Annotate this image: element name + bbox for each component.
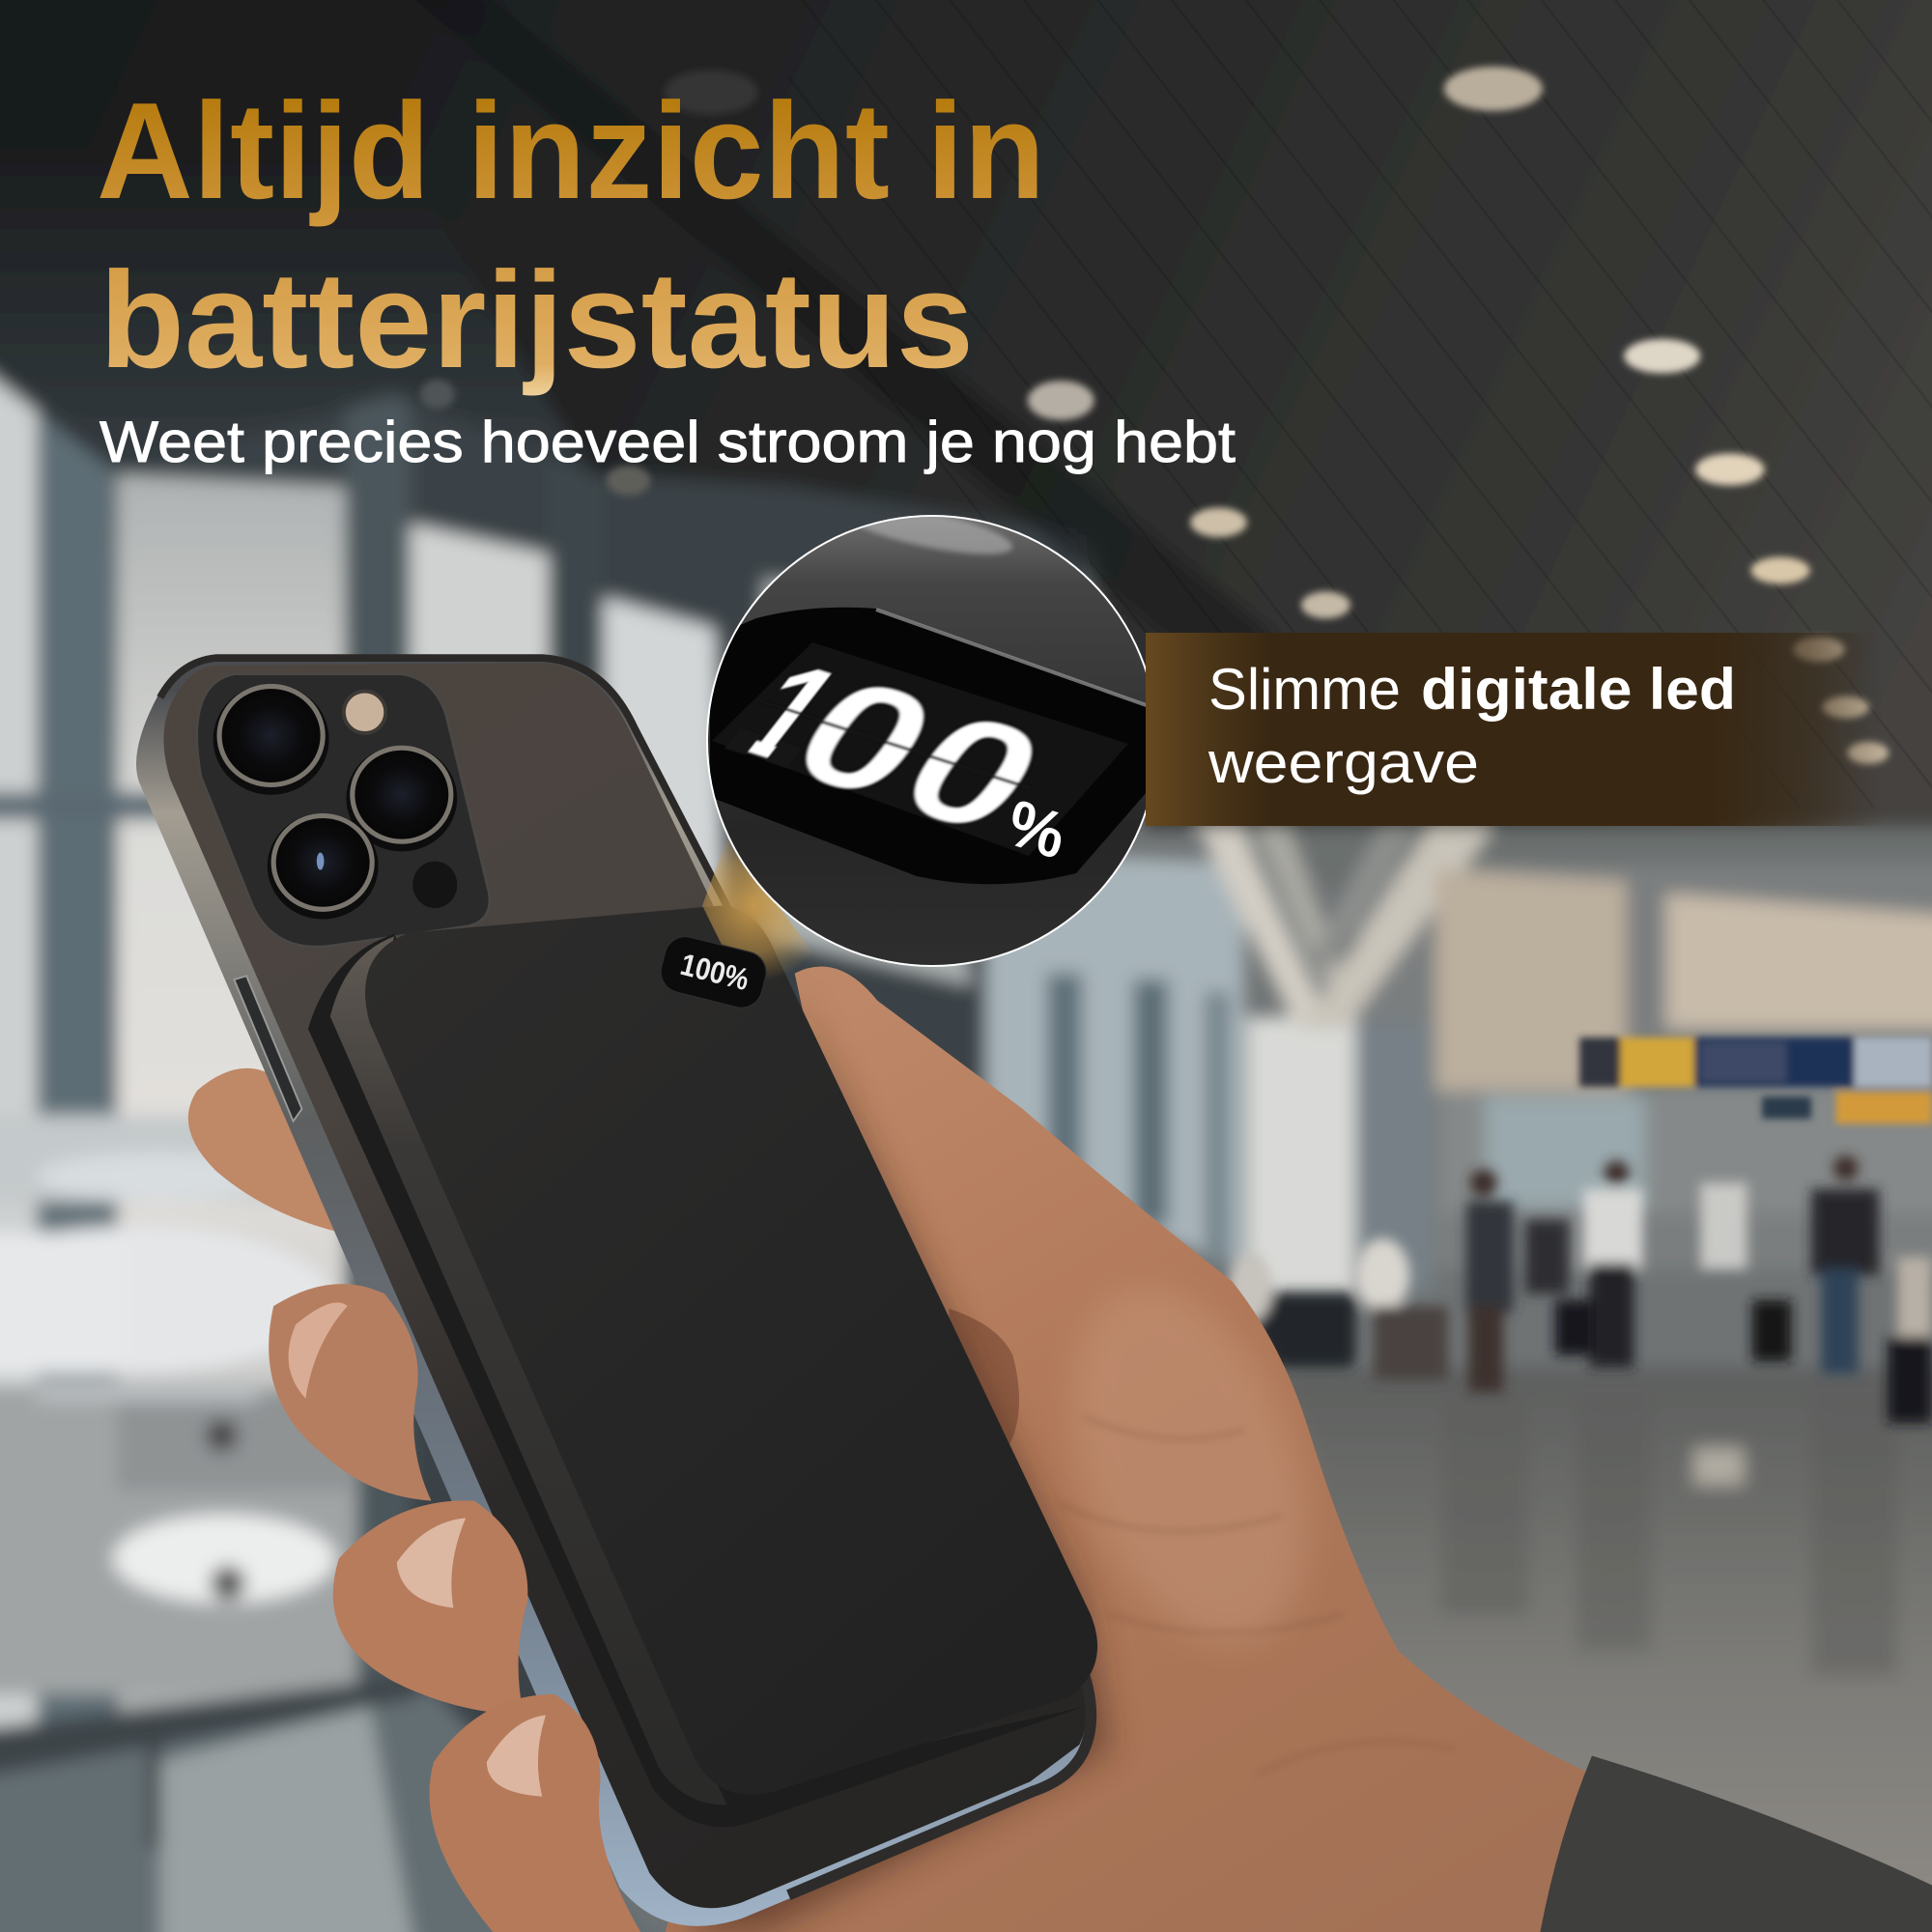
small led display (656, 932, 771, 1012)
phone (136, 656, 1094, 1926)
wrinkle lines on the hand (1060, 1417, 1454, 1775)
palm and thumb (666, 967, 1592, 1932)
ceiling lights (420, 67, 1889, 764)
banner text: Slimme (1208, 657, 1401, 722)
power bank face (365, 905, 1097, 1795)
right wall panels (1355, 868, 1932, 1293)
palm highlight (1028, 1257, 1350, 1676)
aeroplane outside (0, 1152, 332, 1452)
flash (344, 692, 385, 733)
phone frame (136, 656, 1094, 1926)
window wall left (0, 246, 1084, 1762)
lens right (346, 746, 457, 851)
ceiling (0, 0, 1932, 828)
service car (113, 1515, 335, 1603)
gold glow beam (702, 838, 838, 1010)
digit one (724, 668, 833, 767)
shadow cast by the phone on the hand (690, 985, 1109, 1932)
title: Altijd inzicht in (97, 74, 1045, 228)
palm crease (949, 1309, 1019, 1454)
top fingertip behind phone (188, 1068, 339, 1233)
digits 00 (804, 686, 1034, 825)
lens bottom (268, 813, 379, 920)
digit one: 1 (706, 634, 873, 791)
subtitle: Weet precies hoeveel stroom je nog hebt (99, 410, 1236, 474)
power bank (308, 838, 1097, 1827)
ceiling slat lines (1870, 593, 1932, 808)
camera bump (197, 674, 490, 947)
dark upper rim (160, 658, 733, 918)
people in the hall (1229, 1155, 1932, 1423)
finger with nail, lower (429, 1694, 640, 1932)
hand holding phone and power bank (136, 656, 1932, 1932)
top highlight (860, 517, 1014, 556)
banner text: digitale led (1421, 657, 1736, 722)
phone back (163, 663, 1086, 1908)
lit display panel (712, 642, 1128, 856)
power bank shadow side (308, 934, 1084, 1827)
floor left (0, 1676, 690, 1932)
black display recess (710, 608, 1159, 884)
banner text (1208, 657, 1736, 795)
title: batterijstatus (99, 243, 974, 397)
small led display: 100% (677, 947, 753, 997)
percent sign: % (1001, 786, 1072, 874)
lens top (213, 684, 329, 795)
finger with nail, middle (333, 1500, 527, 1716)
side button (234, 976, 301, 1122)
central column and branches (985, 828, 1932, 1293)
floor right (1233, 1368, 1932, 1932)
digits 00: 00 (759, 645, 1083, 866)
dark lower right rim (788, 1658, 1091, 1895)
banner text: weergave (1208, 730, 1479, 795)
flight information sign (1579, 1037, 1932, 1123)
power bank side (330, 936, 727, 1805)
sleeve (1540, 1756, 1932, 1932)
recess glossy edge (876, 610, 1154, 708)
title (97, 74, 1045, 397)
matte power bank surface (705, 512, 1159, 976)
finger with nail, upper (269, 1284, 431, 1501)
zoom callout circle (705, 495, 1159, 976)
microphone sensor (412, 862, 457, 908)
callout banner (1146, 633, 1884, 826)
